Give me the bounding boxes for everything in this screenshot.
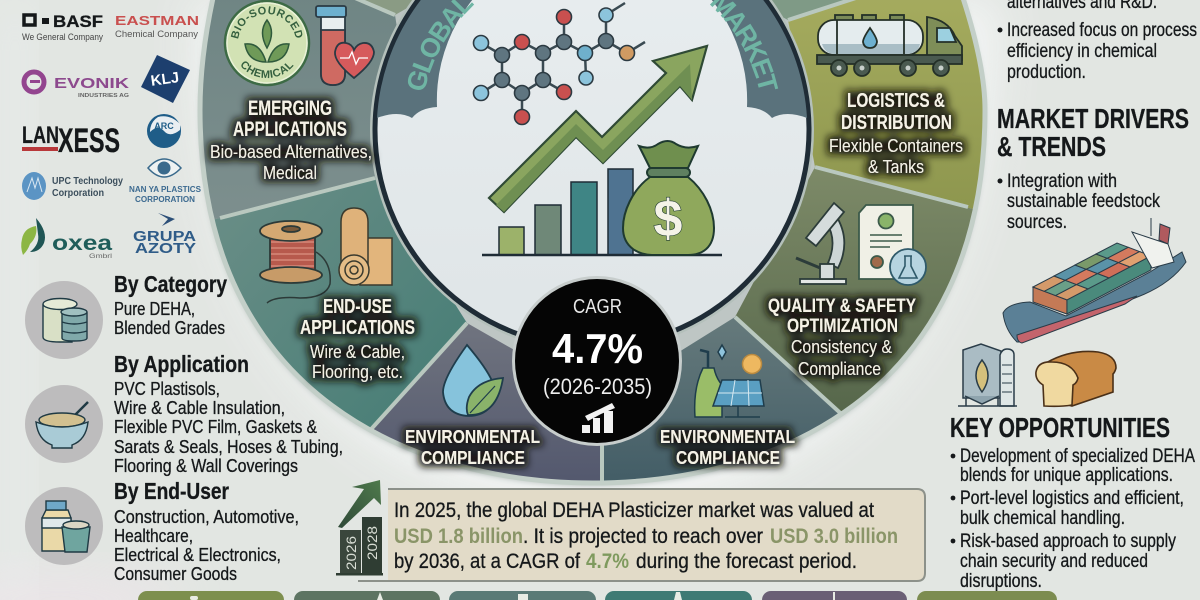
icon: carton and bucket [25, 487, 103, 565]
text: opportunities bullets: disruptions. [960, 571, 1042, 592]
logo: Grupa Azoty: AZOTY [135, 240, 196, 257]
text: by end-user: Consumer Goods [114, 564, 237, 584]
logo: Oxea: Gmbrl [89, 254, 112, 260]
logo: round blue badge: ARC [154, 121, 174, 131]
text: quality and safety optimization: Consistency & [791, 337, 892, 357]
CAGR badge [512, 276, 682, 446]
logo: Lanxess: XESS [58, 122, 120, 160]
logo: BASF [22, 12, 103, 43]
text: by end-user: By End-User [114, 478, 229, 504]
logo: BASF: We General Company [22, 32, 103, 43]
icon: test tube and heart [316, 6, 374, 85]
callout text: 4.7% [586, 550, 629, 573]
logo: Eastman: Chemical Company [115, 29, 198, 40]
logo: UPC Technology [22, 172, 123, 200]
logo: UPC Technology: UPC Technology [52, 176, 123, 187]
text: quality and safety optimization: QUALITY & SAFETY [768, 296, 916, 317]
icon: bottle, solar panel and sun [695, 345, 764, 417]
text: logistics and distribution: & Tanks [868, 157, 924, 177]
text: by category: Pure DEHA, [114, 299, 195, 319]
text: end-use applications: END-USE [323, 296, 392, 318]
text: by category [114, 271, 227, 338]
text: quality and safety optimization: Compliance [798, 359, 881, 379]
logo: Grupa Azoty [133, 213, 196, 257]
logo: KLJ: KLJ [150, 69, 180, 90]
icon: flooring roll [339, 208, 392, 285]
icon: water drop and leaf [443, 345, 503, 416]
logo: Nan Ya Plastics [129, 159, 202, 204]
text: environmental compliance right [660, 427, 795, 468]
wheel outer rim [200, 0, 985, 483]
callout text: . It is projected to reach over [523, 525, 763, 548]
text: restraints bullets [998, 0, 1197, 83]
callout box [358, 489, 925, 581]
text: environmental compliance left [405, 427, 540, 468]
icon: money bag: $ [654, 190, 683, 248]
text: quality and safety optimization [768, 296, 916, 379]
icon: data stack [25, 281, 103, 359]
callout text: during the forecast period. [636, 550, 857, 573]
text: environmental compliance left: COMPLIANCE [421, 448, 525, 468]
icon: bread loaf [1036, 351, 1116, 406]
logo: BASF: BASF [53, 12, 103, 31]
callout text [394, 499, 898, 573]
panel: drivers and trends [950, 0, 1197, 592]
text: opportunities bullets: chain security and reduced [960, 551, 1148, 572]
logo: Eastman [115, 13, 199, 40]
text: by application: Sarats & Seals, Hoses & Tubing, [114, 437, 343, 457]
text: restraints bullets: efficiency in chemical [1007, 40, 1157, 62]
text: by end-user: Electrical & Electronics, [114, 545, 281, 565]
icon: bio-sourced chemical badge [224, 0, 310, 86]
text: quality and safety optimization: OPTIMIZATION [787, 316, 898, 337]
text: by end-user [114, 478, 299, 584]
panel: market segments wheel [198, 0, 988, 488]
text: restraints bullets: production. [1007, 61, 1086, 83]
text: by end-user: Healthcare, [114, 526, 193, 546]
text: environmental compliance right: ENVIRONMENTAL [660, 427, 795, 447]
icon: wire spool [260, 221, 330, 303]
text: logistics and distribution: LOGISTICS & [847, 90, 945, 112]
text: drivers bullet [998, 170, 1160, 233]
icon: microscope [796, 203, 846, 284]
wheel shadow [200, 1, 985, 486]
logo: Evonik: EVONIK [54, 75, 129, 92]
text: emerging applications: EMERGING [248, 97, 332, 120]
callout text: USD 3.0 billion [770, 525, 898, 548]
logo: Oxea: oxea [52, 232, 112, 255]
CAGR badge: CAGR [573, 296, 622, 318]
icon: molecule [474, 3, 645, 124]
text: end-use applications: Wire & Cable, [310, 342, 405, 362]
text: by application: PVC Plastisols, [114, 379, 220, 399]
text: by application [114, 351, 343, 476]
panel: market summary callout [336, 480, 925, 581]
logo: Eastman: EASTMAN [115, 13, 199, 28]
wheel segments [190, 0, 1000, 500]
bottom tabs row [138, 591, 1057, 600]
text: end-use applications: APPLICATIONS [300, 317, 415, 339]
logo: Evonik [24, 72, 129, 99]
logo: Nan Ya Plastics: CORPORATION [135, 195, 195, 204]
icon: cereal bowl [25, 385, 103, 463]
text: drivers bullet: sustainable feedstock [1007, 190, 1160, 212]
text: logistics and distribution: DISTRIBUTION [841, 112, 952, 134]
text: by application: Flexible PVC Film, Gaskets & [114, 417, 317, 437]
icon: tanker truck [817, 15, 962, 76]
CAGR badge: 4.7% [552, 325, 643, 372]
logo: Nan Ya Plastics: NAN YA PLASTICS [129, 185, 202, 194]
icon: money bag [623, 141, 714, 255]
logo: round blue badge [147, 114, 181, 148]
text: end-use applications [300, 296, 415, 382]
text: emerging applications: APPLICATIONS [233, 118, 347, 141]
text: logistics and distribution: Flexible Containers [829, 136, 963, 156]
icon: grain silo [958, 344, 1017, 406]
text: environmental compliance left: ENVIRONMENTAL [405, 427, 540, 447]
icon: container ship [1003, 218, 1186, 343]
text: emerging applications [210, 97, 372, 183]
center disc [370, 0, 814, 352]
text: logistics and distribution [829, 90, 963, 177]
panel: company logos [21, 12, 202, 260]
text: end-use applications: Flooring, etc. [312, 362, 403, 382]
text: drivers bullet: Integration with [1007, 170, 1117, 192]
text: environmental compliance right: COMPLIANCE [676, 448, 780, 468]
icon: small growth bars [582, 403, 615, 433]
heading: market drivers and trends: & TRENDS [997, 131, 1106, 162]
text: by end-user: Construction, Automotive, [114, 507, 299, 527]
logo: Lanxess: LAN [22, 122, 59, 149]
logo: Oxea [21, 218, 112, 260]
title banner [377, 0, 807, 118]
text: by application: Wire & Cable Insulation, [114, 398, 285, 418]
icon: rising bars 2026 and 2028 [336, 480, 383, 576]
logo: Evonik: INDUSTRIES AG [78, 93, 129, 99]
panel: segmentation [25, 271, 343, 584]
bar chart [482, 169, 722, 255]
icon: bio-sourced chemical badge: BIO-SOURCED [230, 6, 302, 39]
text: opportunities bullets [951, 446, 1195, 592]
icon: certificate with flask [859, 205, 926, 285]
text: opportunities bullets: bulk chemical handling. [960, 508, 1125, 529]
text: by application: By Application [114, 351, 249, 377]
icon: rising bars 2026 and 2028: 2028 [364, 526, 380, 560]
text: by category: By Category [114, 271, 227, 297]
icon: growth arrow [489, 46, 707, 212]
text: by category: Blended Grades [114, 318, 225, 338]
text: emerging applications: Bio-based Alternatives, [210, 141, 372, 162]
text: by application: Flooring & Wall Coverings [114, 456, 298, 476]
callout text: USD 1.8 billion [394, 525, 523, 548]
callout text: by 2036, at a CAGR of [394, 550, 580, 573]
icon: bio-sourced chemical badge: CHEMICAL [241, 61, 294, 78]
icon: rising bars 2026 and 2028: 2026 [343, 536, 359, 570]
logo: KLJ [141, 55, 190, 103]
logo: UPC Technology: Corporation [52, 188, 104, 199]
logo: Grupa Azoty: GRUPA [133, 228, 196, 245]
text: drivers bullet: sources. [1007, 211, 1067, 233]
logo: Lanxess [22, 122, 120, 160]
CAGR badge: (2026-2035) [543, 374, 652, 399]
heading: market drivers and trends [997, 103, 1189, 162]
text: emerging applications: Medical [263, 162, 317, 183]
callout text: In 2025, the global DEHA Plasticizer market was valued at [394, 499, 874, 522]
